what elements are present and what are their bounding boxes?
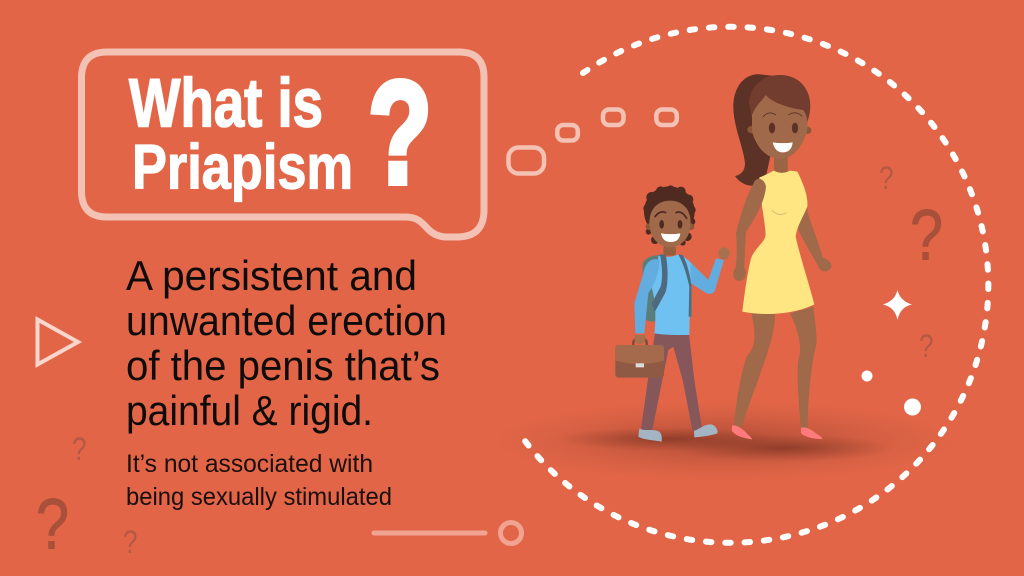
definition text: painful & rigid. (126, 387, 373, 434)
title (129, 64, 353, 202)
boy eyes (659, 220, 682, 229)
big question mark: ? (368, 51, 432, 214)
question marks: ? (910, 196, 943, 276)
boy hair (643, 185, 696, 246)
boy shoes (638, 424, 718, 442)
boy wave hand (718, 247, 730, 259)
boy brows (655, 212, 687, 218)
title: What is (129, 64, 323, 142)
woman shoes (732, 425, 823, 439)
sub text (126, 450, 392, 511)
boy waving sleeve (688, 258, 724, 294)
woman legs (734, 307, 817, 428)
woman far arm (797, 173, 832, 271)
boy face (649, 201, 691, 247)
triangle icon (38, 320, 78, 364)
dots (862, 370, 921, 416)
boy backpack (643, 255, 692, 322)
small question marks: ? (123, 524, 138, 560)
ground shadow (490, 401, 960, 481)
speech bubble (82, 52, 484, 237)
woman back hair (733, 74, 780, 186)
definition text: A persistent and (126, 252, 417, 299)
briefcase (615, 335, 664, 378)
thought bubbles (508, 110, 677, 174)
boy shirt (650, 254, 691, 335)
sub text: It’s not associated with (126, 450, 373, 478)
boy ears (646, 223, 694, 230)
dashed circle (525, 27, 988, 543)
small question marks (72, 160, 934, 560)
boy pants (641, 333, 702, 433)
woman near arm (733, 179, 766, 281)
boy mouth (661, 233, 680, 242)
line and ring (374, 522, 522, 544)
boy neck (663, 245, 676, 256)
woman dress (742, 171, 814, 314)
question marks (36, 196, 943, 564)
sub text: being sexually stimulated (126, 483, 392, 511)
boy backpack straps (652, 254, 691, 317)
small question marks: ? (879, 160, 894, 196)
woman face (752, 95, 808, 159)
woman mouth (773, 142, 793, 152)
definition text: of the penis that’s (126, 342, 440, 389)
definition text: unwanted erection (126, 297, 447, 344)
definition text (126, 252, 447, 434)
small question marks: ? (72, 431, 86, 467)
woman brows (763, 113, 802, 117)
boy near sleeve (634, 259, 659, 333)
woman front hair (749, 75, 810, 126)
people illustration (615, 74, 832, 442)
woman ears (747, 126, 811, 134)
question marks: ? (36, 486, 69, 564)
woman (732, 74, 832, 439)
woman neck (774, 155, 788, 175)
title: Priapism (132, 132, 353, 202)
small question marks: ? (919, 328, 934, 364)
boy (615, 185, 730, 442)
sparkle (883, 290, 912, 320)
woman eyes (769, 123, 798, 133)
